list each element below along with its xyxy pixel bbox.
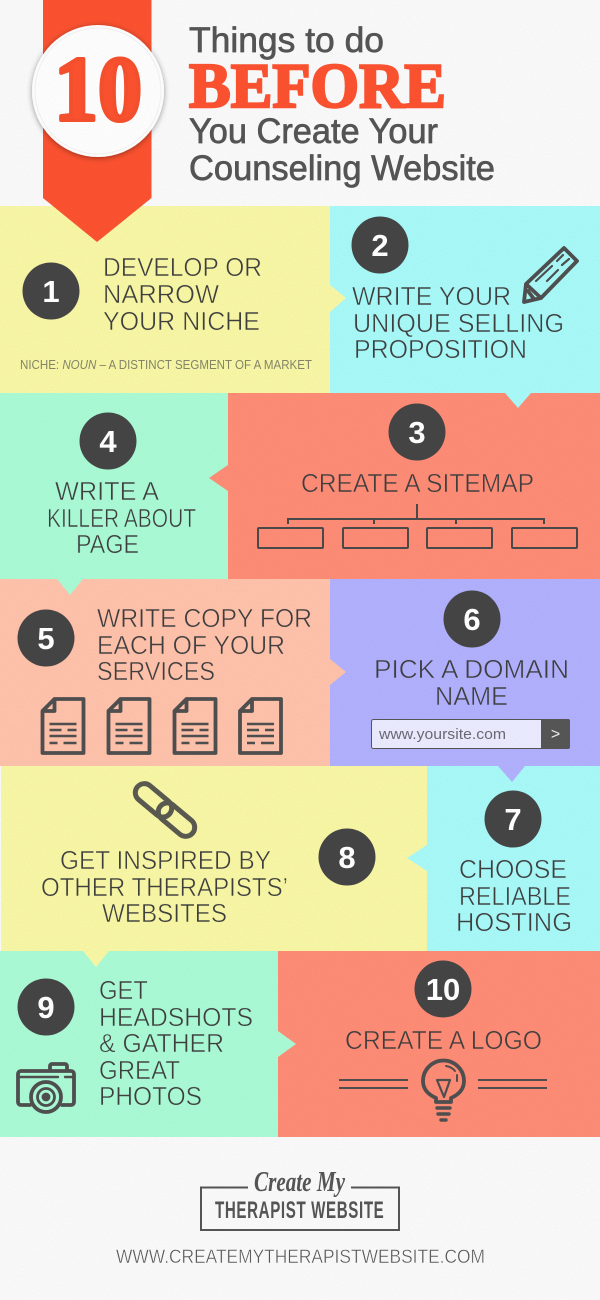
number badge 8: 8: [338, 840, 356, 875]
title: Things to do: [189, 21, 384, 60]
heading step 1: DEVELOP OR: [103, 252, 262, 282]
icon: camera: [18, 1064, 74, 1112]
panel: step 6 domain name: [330, 579, 600, 766]
badge: 10: 10: [54, 38, 142, 140]
heading step 9: HEADSHOTS: [99, 1002, 253, 1032]
number badge 10: [414, 960, 472, 1018]
heading step 4: [47, 476, 196, 559]
number badge 6: 6: [463, 602, 481, 637]
heading step 8: WEBSITES: [102, 898, 227, 928]
heading step 8: [41, 845, 288, 928]
heading step 3: CREATE A SITEMAP: [301, 468, 534, 498]
heading step 6: NAME: [435, 681, 508, 711]
arrow from step 8: [83, 951, 109, 967]
heading step 5: EACH OF YOUR: [97, 630, 285, 660]
arrow toward step 8: [407, 845, 427, 871]
heading step 8: GET INSPIRED BY: [60, 845, 271, 875]
number badge 1: [22, 262, 80, 320]
heading step 2: UNIQUE SELLING: [353, 308, 564, 338]
heading step 9: & GATHER: [99, 1028, 224, 1058]
domain search box: >: [551, 726, 560, 743]
domain search box: www.yoursite.com: [378, 726, 506, 743]
panel: step 4 about page: [0, 393, 228, 579]
panel: step 9 photos: [0, 951, 278, 1137]
number badge 10: 10: [426, 972, 460, 1007]
panel: step 3 sitemap: [209, 393, 600, 579]
number badge 5: 5: [37, 621, 55, 656]
icon: chain link: [132, 780, 198, 840]
number badge 9: 9: [37, 990, 55, 1025]
heading step 9: GET: [99, 975, 148, 1005]
number badge 1: 1: [42, 274, 60, 309]
panel: step 10 logo: [278, 951, 600, 1137]
heading step 9: GREAT: [99, 1055, 180, 1085]
heading step 10: CREATE A LOGO: [345, 1025, 542, 1055]
sitemap diagram: [258, 504, 577, 548]
number badge 2: [352, 216, 408, 274]
heading step 2: WRITE YOUR: [352, 281, 511, 311]
heading step 5: WRITE COPY FOR: [97, 603, 312, 633]
heading step 6: PICK A DOMAIN: [374, 654, 569, 684]
number badge 8: [318, 828, 376, 886]
heading step 5: [97, 603, 312, 686]
number badge 3: 3: [408, 415, 426, 450]
heading step 7: HOSTING: [456, 907, 572, 937]
arrow toward step 4: [209, 465, 228, 491]
number badge 7: 7: [504, 802, 522, 837]
title: [189, 21, 495, 188]
footer logo: THERAPIST WEBSITE: [215, 1198, 384, 1224]
arrow from step 1: [330, 285, 346, 312]
title: Counseling Website: [189, 149, 495, 188]
heading step 9: [99, 975, 253, 1111]
panel: step 5 service copy: [0, 579, 330, 766]
niche definition: NICHE: NOUN – A DISTINCT SEGMENT OF A MARKET: [20, 358, 312, 372]
heading step 7: CHOOSE: [459, 854, 567, 884]
number badge 7: [484, 790, 542, 848]
icon: light bulb with rules: [339, 1060, 547, 1120]
heading step 4: WRITE A: [55, 476, 160, 506]
panel: step 1 develop niche: [0, 206, 330, 393]
heading step 1: YOUR NICHE: [103, 306, 260, 336]
panel: step 7 hosting: [407, 766, 600, 951]
icon: pencil: [524, 248, 577, 302]
heading step 8: OTHER THERAPISTS’: [41, 872, 288, 902]
heading step 2: PROPOSITION: [354, 334, 527, 364]
number badge 6: [444, 590, 500, 648]
number badge 2: 2: [371, 228, 389, 263]
domain search box: [372, 719, 570, 749]
heading step 4: KILLER ABOUT: [47, 503, 196, 533]
footer logo: Create My: [254, 1166, 345, 1198]
number badge 4: 4: [99, 424, 117, 459]
number badge 5: [18, 610, 74, 666]
heading step 9: PHOTOS: [99, 1081, 202, 1111]
number badge 3: [388, 404, 446, 460]
panel: step 2 selling proposition: [330, 206, 600, 393]
footer url: WWW.CREATEMYTHERAPISTWEBSITE.COM: [116, 1246, 485, 1268]
arrow from step 9: [278, 1031, 296, 1057]
heading step 1: NARROW: [103, 279, 219, 309]
number badge 9: [18, 978, 74, 1036]
arrow from step 5: [330, 659, 346, 685]
icons: four documents: [42, 699, 281, 753]
heading step 4: PAGE: [76, 529, 139, 559]
heading step 7: RELIABLE: [459, 881, 571, 911]
arrow from step 2: [505, 393, 531, 408]
title: You Create Your: [189, 112, 438, 151]
ribbon banner: [43, 0, 152, 242]
badge: 10: [32, 25, 164, 157]
number badge 4: [80, 412, 136, 470]
arrow from step 4: [57, 579, 83, 595]
heading step 6: [374, 654, 569, 711]
panel: step 8 inspiration: [1, 766, 427, 951]
heading step 7: [456, 854, 572, 937]
heading step 1: [103, 252, 262, 336]
heading step 5: SERVICES: [97, 656, 215, 686]
heading step 2: [352, 281, 564, 364]
title: BEFORE: [189, 50, 446, 121]
footer logo: [201, 1166, 399, 1230]
arrow from step 6: [498, 766, 525, 782]
